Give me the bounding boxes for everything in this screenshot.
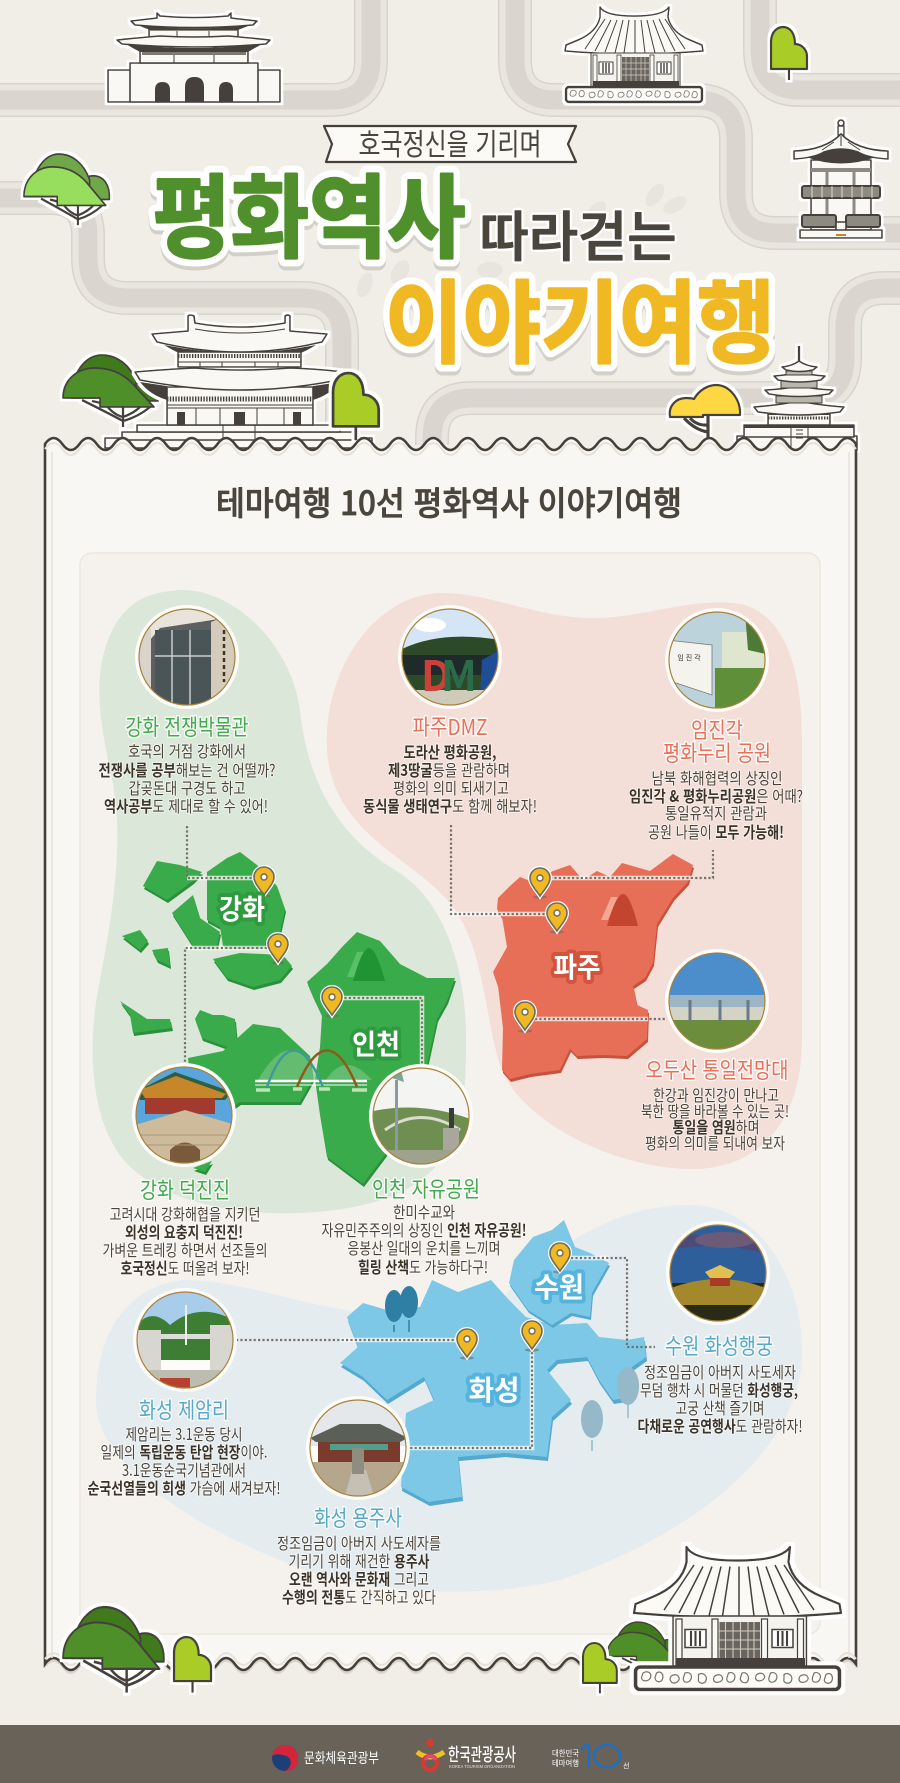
main title: 평화역사 (152, 145, 466, 277)
text block: Deokjinjin: 호국정신도 떠올려 보자! (120, 1255, 250, 1279)
text block: Suwon Hwaseong Haenggung: 다채로운 공연행사도 관람하자! (638, 1413, 802, 1437)
main title: 평화역사 (152, 149, 466, 281)
photo: Incheon Freedom Park (369, 1064, 473, 1168)
text block: Ganghwa War Museum: 호국의 거점 강화에서 (128, 738, 246, 762)
photo: Imjingak: 임 진 각 (677, 653, 701, 663)
text block: Paju DMZ: 도라산 평화공원, (404, 739, 496, 763)
logo: Korea Theme Travel 10: 대한민국 (552, 1748, 579, 1759)
illustration: bottom-right hanok (634, 1547, 841, 1690)
text block: Deokjinjin: 강화 덕진진 (140, 1173, 230, 1205)
photo: Suwon Hwaseong Haenggung (666, 1221, 770, 1325)
panel: Suwon Hwaseong region background (96, 1205, 802, 1592)
background road network (0, 0, 900, 445)
text block: Yongjusa: 오랜 역사와 문화재 그리고 (289, 1566, 429, 1590)
text block: Imjingak Nuri Park: 임진각 & 평화누리공원은 어때? (629, 783, 803, 807)
map labels: 화성 (468, 1369, 520, 1409)
inner content panel (80, 553, 820, 1634)
text block: Incheon Freedom Park: 응봉산 일대의 운치를 느끼며 (348, 1235, 500, 1259)
illustration: pavilion right (794, 120, 888, 238)
main title: 따라걷는 (480, 193, 676, 272)
text block: Paju DMZ: 동식물 생태연구도 함께 해보자! (363, 793, 537, 817)
logo: Ministry of Culture (272, 1745, 379, 1771)
map labels: 파주 (554, 946, 600, 986)
text block: Suwon Hwaseong Haenggung: 무덤 행차 시 머물던 화성행궁, (640, 1377, 798, 1401)
text block: Paju DMZ: 제3땅굴등을 관람하며 (388, 757, 510, 781)
text block: Imjingak Nuri Park: 평화누리 공원 (663, 736, 771, 768)
text block: Odusan Observatory: 통일을 염원하며 (672, 1114, 760, 1138)
logo: Ministry of Culture: 문화체육관광부 (304, 1748, 379, 1768)
illustration: dark green tree (63, 355, 158, 427)
photo: Imjingak (665, 608, 770, 712)
photo: Paju DMZ (398, 605, 502, 709)
text block: Paju DMZ: 파주DMZ (412, 710, 488, 742)
illustration: tree top left (24, 154, 109, 225)
photo: Deokjinjin (132, 1063, 236, 1167)
text block: Paju DMZ (363, 710, 537, 817)
map labels (219, 888, 600, 1409)
text block: Suwon Hwaseong Haenggung: 고궁 산책 즐기며 (676, 1395, 764, 1419)
paper panel (45, 438, 856, 1674)
text block: Odusan Observatory: 평화의 의미를 되내여 보자 (645, 1130, 785, 1154)
text block: Incheon Freedom Park: 힐링 산책도 가능하다구! (358, 1254, 488, 1278)
text block: Yongjusa: 정조임금이 아버지 사도세자를 (277, 1530, 441, 1554)
map pins (254, 867, 570, 1360)
map labels: 강화 (219, 888, 265, 928)
text block: Deokjinjin: 외성의 요충지 덕진진! (125, 1219, 243, 1243)
photo: Paju DMZ: M (441, 643, 477, 704)
illustration: lime tree by hanok (583, 1643, 617, 1693)
illustration: tree behind hanok (607, 1622, 683, 1680)
text block: Odusan Observatory: 오두산 통일전망대 (646, 1053, 788, 1085)
photo: Odusan Unification Observatory (665, 949, 769, 1053)
footer band (0, 1725, 900, 1783)
map: Paju (493, 854, 694, 1082)
text block: Incheon Freedom Park: 자유민주주의의 상징인 인천 자유공원! (322, 1217, 526, 1241)
text block: Jeamni: 3.1운동순국기념관에서 (122, 1457, 246, 1481)
icon: footprints (354, 180, 690, 300)
text block: Deokjinjin: 고려시대 강화해협을 지키던 (110, 1201, 260, 1225)
text block: Suwon Hwaseong Haenggung: 정조임금이 아버지 사도세자 (644, 1359, 796, 1383)
main title (152, 145, 775, 385)
illustration: lime tree by palace (333, 373, 379, 440)
logo: Korea Theme Travel 10: 선 (623, 1761, 629, 1771)
illustration: hanok top right (565, 7, 703, 102)
map labels: 인천 (352, 1023, 400, 1063)
main title: 평화역사 (152, 145, 466, 277)
text block: Yongjusa: 화성 용주사 (314, 1501, 402, 1533)
icon: bridge (255, 1050, 367, 1090)
map: Suwon (509, 1220, 610, 1328)
illustration: bottom-left dark tree (63, 1607, 164, 1693)
text block: Suwon Hwaseong Haenggung (638, 1329, 802, 1437)
text block: Imjingak Nuri Park: 통일유적지 관람과 (665, 800, 767, 824)
text block: Suwon Hwaseong Haenggung: 수원 화성행궁 (665, 1329, 773, 1361)
panel: Paju region background (327, 593, 802, 1169)
illustration: yellow tree (670, 385, 740, 446)
text block: Odusan Observatory (641, 1053, 789, 1154)
photo: Paju DMZ: D (421, 643, 451, 704)
logo: Korea Theme Travel 10: 테마여행 (552, 1758, 579, 1769)
text block: Paju DMZ: 평화의 의미 되새기고 (393, 775, 509, 799)
text block: Jeamni: 제암리는 3.1운동 당시 (126, 1421, 242, 1445)
illustration: tree top right (771, 27, 807, 80)
text block: Ganghwa War Museum (98, 710, 276, 817)
text block: Ganghwa War Museum: 역사공부도 제대로 할 수 있어! (104, 793, 268, 817)
icon: blue trees (385, 1286, 639, 1451)
panel: Ganghwa Incheon region background (93, 590, 466, 1213)
text block: Yongjusa: 기리기 위해 재건한 용주사 (288, 1548, 430, 1572)
text block: Ganghwa War Museum: 갑곶돈대 구경도 하고 (128, 775, 246, 799)
main title: 이야기여행 (385, 251, 775, 381)
illustration: stone gate (108, 13, 280, 102)
logo: Korea Tourism Organization: KOREA TOURISM ORGANIZATION (449, 1764, 515, 1769)
text block: Deokjinjin: 가벼운 트레킹 하면서 선조들의 (102, 1237, 268, 1261)
title ribbon: 호국정신을 기리며 (358, 120, 542, 164)
map: Hwaseong (340, 1280, 647, 1506)
map labels: 수원 (534, 1266, 584, 1306)
text block: Imjingak Nuri Park: 공원 나들이 모두 가능해! (648, 819, 784, 843)
photo: Ganghwa War Museum (135, 605, 239, 709)
section heading: 테마여행 10선 평화역사 이야기여행 (216, 477, 682, 525)
text block: Imjingak Nuri Park: 남북 화해협력의 상징인 (652, 765, 782, 789)
text block: Incheon Freedom Park: 인천 자유공원 (372, 1172, 480, 1204)
text block: Odusan Observatory: 한강과 임진강이 만나고 (653, 1082, 779, 1106)
text block: Jeamni: 순국선열들의 희생 가슴에 새겨보자! (88, 1475, 280, 1499)
logo: Korea Tourism Organization: 한국관광공사 (448, 1741, 516, 1767)
text block: Imjingak Nuri Park (629, 713, 803, 843)
illustration: palace (105, 315, 372, 448)
text block: Yongjusa (277, 1501, 441, 1608)
text block: Jeamni: 일제의 독립운동 탄압 현장이야. (100, 1439, 268, 1463)
text block: Ganghwa War Museum: 전쟁사를 공부해보는 건 어떨까? (98, 757, 276, 781)
connector lines (185, 825, 713, 1448)
text block: Jeamni (88, 1393, 280, 1499)
photo: Jeamni (133, 1288, 237, 1392)
text block: Yongjusa: 수행의 전통도 간직하고 있다 (282, 1584, 436, 1608)
map: Ganghwa and Incheon (120, 852, 456, 1187)
illustration: bottom-left lime tree (174, 1637, 211, 1693)
photo: Yongjusa (306, 1396, 410, 1502)
main title: 이야기여행 (385, 251, 775, 381)
text block: Incheon Freedom Park: 한미수교와 (393, 1199, 455, 1223)
illustration: five-tier pagoda (737, 346, 857, 450)
main title: 이야기여행 (385, 255, 775, 385)
logo: Korea Theme Travel 10 (552, 1745, 629, 1771)
text block: Imjingak Nuri Park: 임진각 (691, 713, 743, 745)
text block: Jeamni: 화성 제암리 (139, 1393, 229, 1425)
text block: Odusan Observatory: 북한 땅을 바라볼 수 있는 곳! (641, 1098, 789, 1122)
text block: Deokjinjin (102, 1173, 268, 1279)
logo: Korea Tourism Organization (417, 1739, 516, 1770)
text block: Incheon Freedom Park (322, 1172, 526, 1278)
text block: Ganghwa War Museum: 강화 전쟁박물관 (126, 710, 248, 742)
main title: 따라걷는 (480, 193, 676, 272)
